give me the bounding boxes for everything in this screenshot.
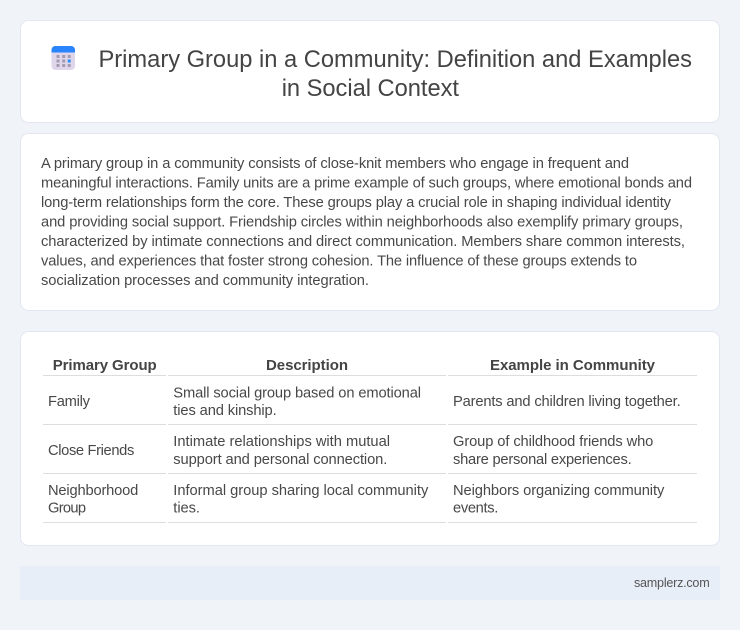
table row: neighborhood group: events. [453, 501, 498, 517]
table header: Primary Group [53, 357, 157, 374]
text block: definition: long-term relationships form the core. These groups play a crucial role in shaping individual identity [41, 195, 672, 211]
table row: family [43, 385, 697, 425]
icon: calendar [52, 46, 75, 70]
table row: close friends: support and personal connection. [173, 452, 387, 468]
table header: Description [266, 357, 348, 374]
panel: title card [20, 20, 720, 122]
table header [43, 357, 697, 376]
text block: definition [41, 156, 692, 289]
table row: close friends: Close Friends [48, 443, 134, 459]
title [98, 47, 692, 102]
table row: close friends [43, 434, 697, 474]
footer: samplerz.com [634, 576, 710, 590]
table row: neighborhood group: Neighbors organizing community [453, 483, 665, 499]
table row: family: Parents and children living together. [453, 394, 681, 410]
text block: definition: A primary group in a community consists of close-knit members who engage in frequent and [41, 156, 629, 172]
text block: definition: and providing social support. Friendship circles within neighborhoods also exemplify primary groups, [41, 214, 683, 230]
table row: neighborhood group: Group [48, 501, 86, 517]
text block: definition: characterized by intimate connections and direct communication. Members share common interests, [41, 234, 685, 250]
panel: definition paragraph [20, 134, 720, 310]
text block: definition: socialization processes and community integration. [41, 273, 369, 289]
table row: neighborhood group [43, 483, 697, 523]
table header: Example in Community [490, 357, 656, 374]
table row: family: Small social group based on emotional [173, 385, 421, 401]
text block: definition: meaningful interactions. Family units are a prime example of such groups, where emotional bonds and [41, 176, 692, 192]
footer [20, 566, 720, 600]
table row: close friends: Group of childhood friends who [453, 434, 653, 450]
text block: definition: values, and experiences that foster strong cohesion. The influence of these groups extends to [41, 254, 637, 270]
table row: neighborhood group: ties. [173, 501, 200, 517]
table row: neighborhood group: Neighborhood [48, 483, 138, 499]
title: Primary Group in a Community: Definition and Examples [98, 47, 692, 73]
table row: close friends: share personal experiences. [453, 452, 632, 468]
panel: table card [20, 332, 720, 546]
table row: close friends: Intimate relationships with mutual [173, 434, 390, 450]
title: in Social Context [282, 76, 459, 102]
table row: family: ties and kinship. [173, 403, 277, 419]
table row: family: Family [48, 394, 91, 410]
table row: neighborhood group: Informal group sharing local community [173, 483, 429, 499]
